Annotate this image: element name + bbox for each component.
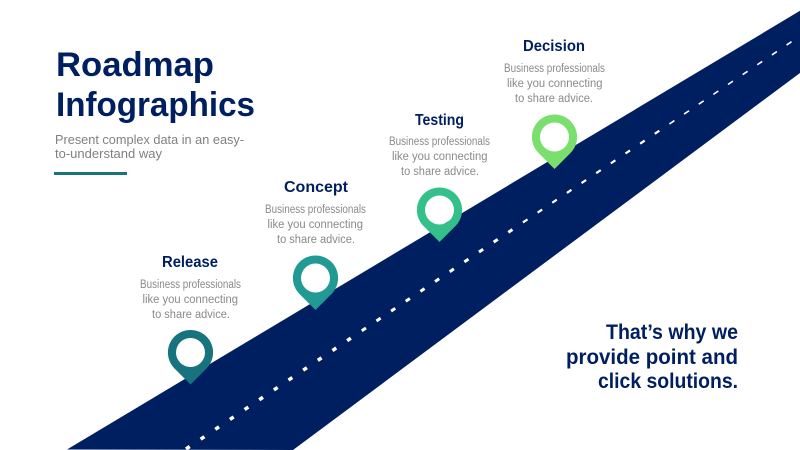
callout: click solutions. (598, 370, 738, 393)
title underline (54, 172, 127, 175)
text: Testing description (389, 136, 490, 178)
icon: Testing pin (417, 187, 462, 242)
subtitle: to-understand way (55, 146, 162, 161)
heading: Decision: Decision (523, 38, 585, 55)
step: Decision (504, 38, 605, 169)
text: Release description (140, 279, 241, 321)
icon: Release pin (168, 330, 213, 384)
text: Testing description: like you connecting (392, 151, 488, 163)
text: Decision description: like you connecting (507, 78, 602, 90)
text: Concept description (265, 204, 366, 246)
text: Decision description: to share advice. (515, 93, 593, 105)
subtitle: Present complex data in an easy- (55, 132, 244, 147)
callout: That’s why we (606, 321, 738, 344)
callout (566, 321, 738, 393)
text: Release description: to share advice. (152, 309, 230, 321)
heading: Concept: Concept (284, 179, 349, 196)
text: Release description: Business professionals (140, 279, 241, 291)
step: Release (140, 254, 241, 384)
icon: Decision pin (532, 114, 577, 169)
text: Concept description: Business professionals (265, 204, 366, 216)
title: Roadmap (56, 46, 214, 84)
text: Decision description: Business professionals (504, 63, 605, 75)
icon: Concept pin (293, 255, 338, 310)
heading: Testing: Testing (415, 112, 464, 129)
text: Concept description: to share advice. (277, 234, 355, 246)
text: Concept description: like you connecting (268, 219, 363, 231)
title: Infographics (56, 86, 255, 124)
text: Release description: like you connecting (142, 294, 238, 306)
subtitle (55, 132, 244, 161)
heading: Release: Release (162, 254, 218, 271)
step: Testing (389, 112, 490, 242)
text: Testing description: to share advice. (401, 166, 479, 178)
title (56, 46, 255, 124)
text: Testing description: Business professionals (389, 136, 490, 148)
step: Concept (265, 179, 366, 310)
text: Decision description (504, 63, 605, 105)
callout: provide point and (566, 346, 738, 369)
